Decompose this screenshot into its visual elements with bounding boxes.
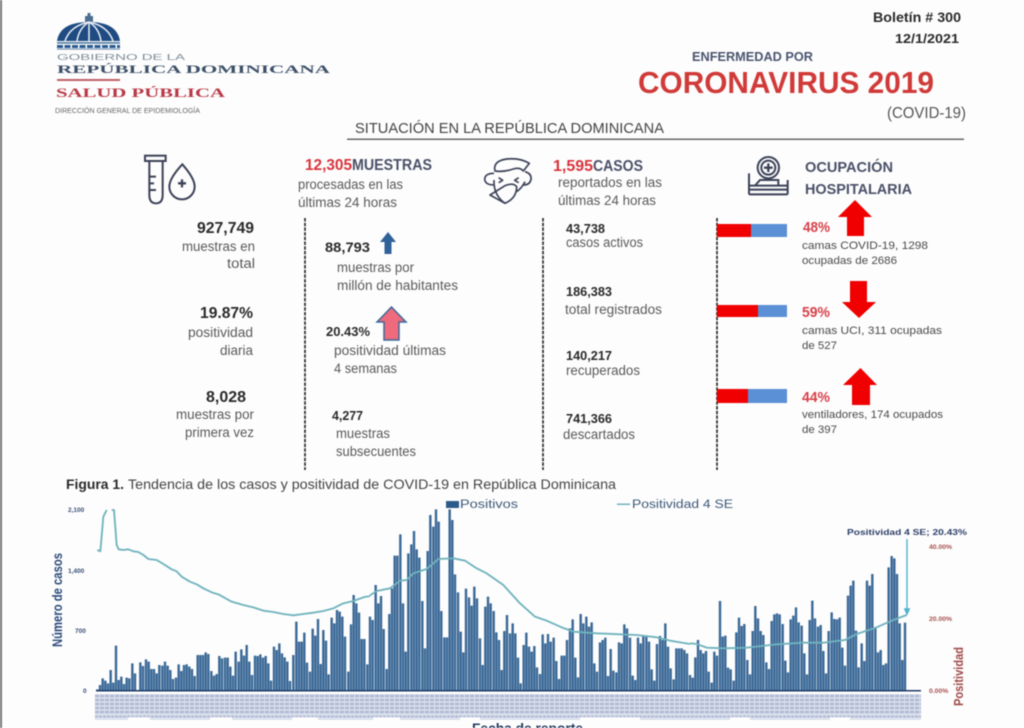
right axis labels: [929, 544, 952, 695]
bar: ventiladores 44%: [717, 389, 787, 403]
left axis labels: 1,400: [68, 568, 85, 575]
left axis title: Número de casos: [50, 553, 65, 647]
icon: red down arrow: [842, 281, 876, 318]
column: casos detail: 43,738: [566, 222, 605, 236]
heading: muestras: [298, 157, 432, 210]
title: ENFERMEDAD POR: [692, 50, 813, 64]
column: casos detail: 140,217: [566, 349, 612, 363]
callout leader arrow: [905, 539, 909, 614]
section heading: SITUACIÓN EN LA REPÚBLICA DOMINICANA: [355, 120, 664, 137]
column: muestras detail: 4,277: [332, 409, 363, 423]
heading: muestras: últimas 24 horas: [298, 195, 397, 210]
column: hospital occupancy: ocupadas de 2686: [802, 255, 897, 267]
left axis labels: 2,100: [68, 507, 85, 514]
line: positivity 4 SE, left part: [97, 510, 370, 615]
bulletin number and date: [873, 10, 961, 46]
bulletin number and date: Boletín # 300: [873, 10, 961, 25]
icon: red up arrow: [838, 200, 872, 236]
heading: casos: 1,595: [553, 158, 593, 175]
column: casos detail: casos activos: [566, 235, 643, 250]
column: casos detail: recuperados: [566, 363, 640, 378]
icon: test tube and blood drop: [145, 156, 195, 203]
callout: positividad 4 SE: Positividad 4 SE; 20.43%: [847, 528, 968, 537]
chart legend: [446, 499, 733, 511]
icon: face with mask: [485, 159, 531, 203]
column: hospital occupancy: 59%: [802, 305, 830, 321]
right axis labels: 20.00%: [929, 616, 952, 623]
column: muestras detail: 4 semanas: [334, 361, 397, 376]
right axis title: Positividad: [951, 647, 966, 706]
heading: muestras: procesadas en las: [298, 177, 403, 192]
icon: blue up arrow: [380, 232, 396, 254]
column: casos detail: [563, 222, 662, 442]
column: hospital occupancy: [717, 200, 944, 436]
icon: pink up arrow: [377, 307, 406, 340]
column: muestras detail: [325, 232, 458, 459]
line: positivity 4 SE, middle part: [370, 558, 690, 644]
column: muestras totals: 19.87%: [200, 305, 253, 322]
left axis labels: 0: [83, 688, 87, 695]
column: muestras detail: 20.43%: [326, 325, 370, 339]
column: muestras totals: positividad: [188, 325, 253, 340]
heading: casos: últimas 24 horas: [558, 193, 656, 208]
column: muestras detail: muestras por: [337, 260, 414, 275]
column: muestras totals: muestras en: [182, 239, 255, 254]
column: muestras totals: [176, 220, 255, 440]
column: hospital occupancy: 44%: [802, 390, 830, 406]
heading: ocupación hospitalaria: HOSPITALARIA: [805, 181, 912, 198]
x axis line: [96, 690, 921, 692]
figure caption: Tendencia de los casos y positividad de COVID-19 en República Dominicana: [128, 476, 616, 492]
column: casos detail: 741,366: [566, 412, 612, 426]
column: muestras totals: diaria: [220, 343, 253, 358]
column: casos detail: total registrados: [565, 302, 662, 317]
column: hospital occupancy: de 397: [802, 424, 837, 436]
bars: positive cases, right part: [690, 556, 905, 690]
column: hospital occupancy: camas COVID-19, 1298: [802, 240, 928, 252]
column: hospital occupancy: de 527: [802, 340, 837, 352]
title: CORONAVIRUS 2019: [638, 65, 934, 100]
column: hospital occupancy: 48%: [803, 220, 830, 236]
heading: muestras: MUESTRAS: [352, 157, 432, 174]
heading: ocupación hospitalaria: [805, 158, 912, 198]
logo: Gobierno de la República Dominicana, Salud Pública: [55, 13, 331, 115]
line: positivity 4 SE, right part: [690, 615, 907, 648]
heading: casos: [553, 158, 662, 208]
column: casos detail: 186,383: [566, 285, 612, 299]
bar: camas COVID-19 48%: [717, 224, 787, 237]
left axis labels: 700: [75, 628, 86, 635]
column: muestras detail: muestras: [336, 426, 390, 441]
column: muestras detail: subsecuentes: [336, 444, 416, 459]
column: muestras totals: muestras por: [176, 407, 254, 422]
column: muestras detail: positividad últimas: [334, 343, 446, 358]
right axis labels: 40.00%: [929, 544, 952, 551]
icon: hospital bed: [749, 157, 788, 194]
column: casos detail: descartados: [563, 427, 635, 442]
bar: camas UCI 59%: [717, 305, 787, 317]
heading: casos: CASOS: [593, 158, 643, 175]
logo: Gobierno de la República Dominicana, Salud Pública: GOBIERNO DE LA: [57, 53, 186, 62]
column: muestras totals: primera vez: [185, 425, 254, 440]
column: muestras totals: 8,028: [206, 389, 246, 406]
column: hospital occupancy: camas UCI, 311 ocupadas: [802, 325, 943, 337]
column: muestras detail: 88,793: [325, 240, 371, 255]
left axis labels: [68, 507, 87, 695]
column: muestras totals: 927,749: [197, 220, 254, 237]
chart: cases and positivity trend: [50, 507, 968, 728]
logo: Gobierno de la República Dominicana, Salud Pública: DIRECCIÓN GENERAL DE EPIDEMIOLOGÍA: [55, 106, 200, 115]
bulletin number and date: 12/1/2021: [895, 32, 959, 46]
column: muestras detail: millón de habitantes: [337, 278, 458, 293]
title: [638, 50, 966, 122]
bars: positive cases, left part: [97, 595, 367, 690]
heading: ocupación hospitalaria: OCUPACIÓN: [805, 158, 893, 176]
heading: casos: reportados en las: [558, 175, 662, 190]
chart legend: Positivos: [460, 499, 518, 511]
icon: dome: [57, 13, 120, 50]
column: hospital occupancy: ventiladores, 174 ocupados: [802, 409, 944, 421]
bars: positive cases, middle part: [370, 509, 687, 690]
date labels: [95, 694, 921, 720]
heading: muestras: 12,305: [305, 157, 352, 174]
column: muestras totals: total: [227, 256, 255, 271]
logo: Gobierno de la República Dominicana, Salud Pública: SALUD PÚBLICA: [56, 86, 225, 100]
right axis labels: 0.00%: [929, 688, 948, 695]
logo: Gobierno de la República Dominicana, Salud Pública: REPÚBLICA DOMINICANA: [57, 62, 331, 76]
title: (COVID-19): [887, 105, 966, 122]
figure caption: Figura 1.: [66, 476, 124, 492]
icon: red up arrow: [843, 368, 877, 405]
chart legend: Positividad 4 SE: [632, 499, 733, 511]
